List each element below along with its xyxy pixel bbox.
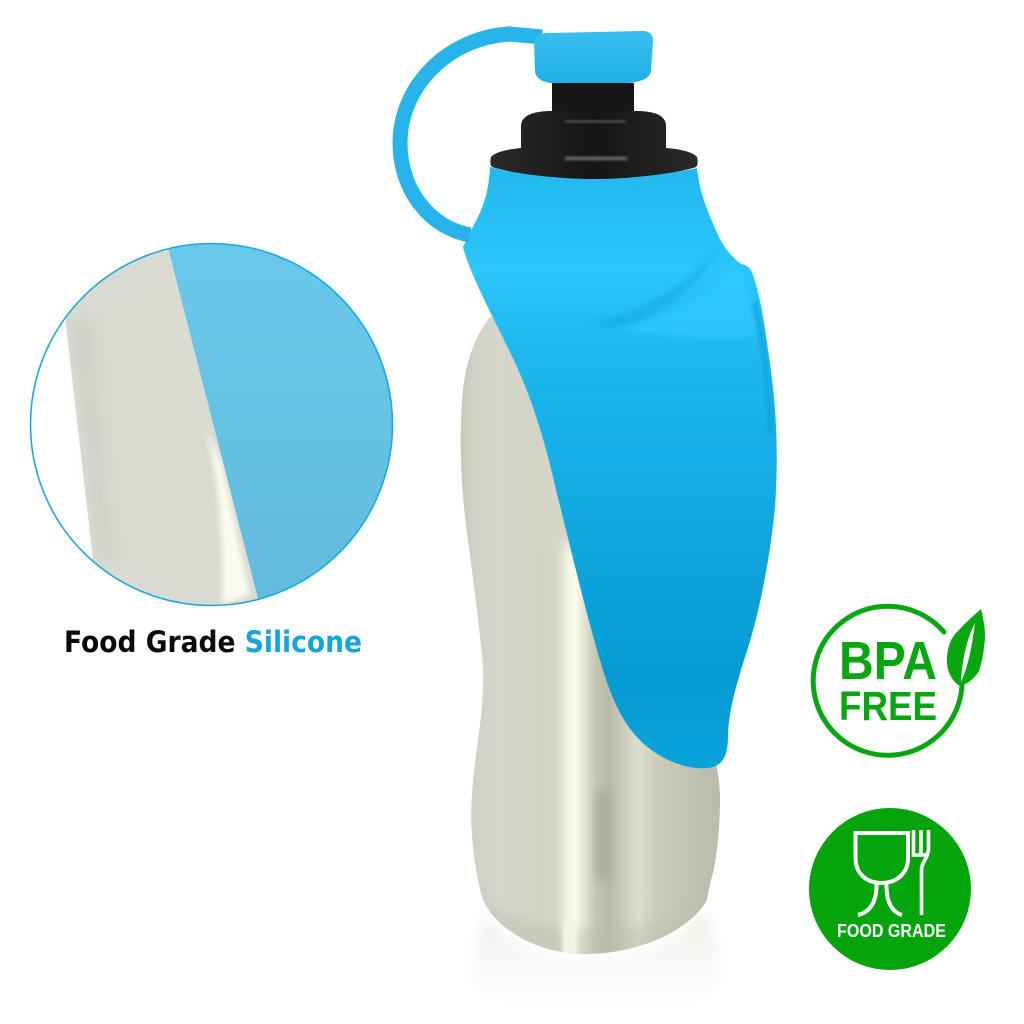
leaf vein [961,623,975,682]
steel left shade band [78,326,101,510]
BPA text: BPA [839,631,937,691]
badge: food grade [809,808,971,970]
icon: fork [914,830,928,915]
silicone sample [166,240,400,610]
silicone sleeve [463,167,777,768]
silicone stopper [534,31,653,84]
sleeve ridge highlight [612,268,756,339]
icon: leaf [947,609,985,686]
steel body [460,316,720,954]
badge: BPA free [813,606,985,755]
sleeve ridge shadow [590,243,721,329]
black collar highlight [565,120,625,122]
bottle reflection [474,908,717,1009]
black collar [521,111,666,152]
black flange [490,148,698,179]
FOOD GRADE text: FOOD GRADE [837,920,946,941]
caption: Food Grade Silicone: Food Grade Silicone [64,625,362,659]
strap pull tab [505,26,530,38]
icon: wine glass [856,833,908,915]
badge ring [813,606,962,755]
flange highlight [565,157,627,160]
FREE text: FREE [839,683,937,729]
magnified material circle [30,240,400,610]
circle outline [30,244,392,606]
sleeve right panel shade [752,300,773,436]
steel highlight [205,425,250,605]
black neck [552,83,634,113]
steel sample [66,240,262,610]
silicone strap [400,34,542,235]
bottle [400,26,777,965]
badge disc [809,808,971,970]
